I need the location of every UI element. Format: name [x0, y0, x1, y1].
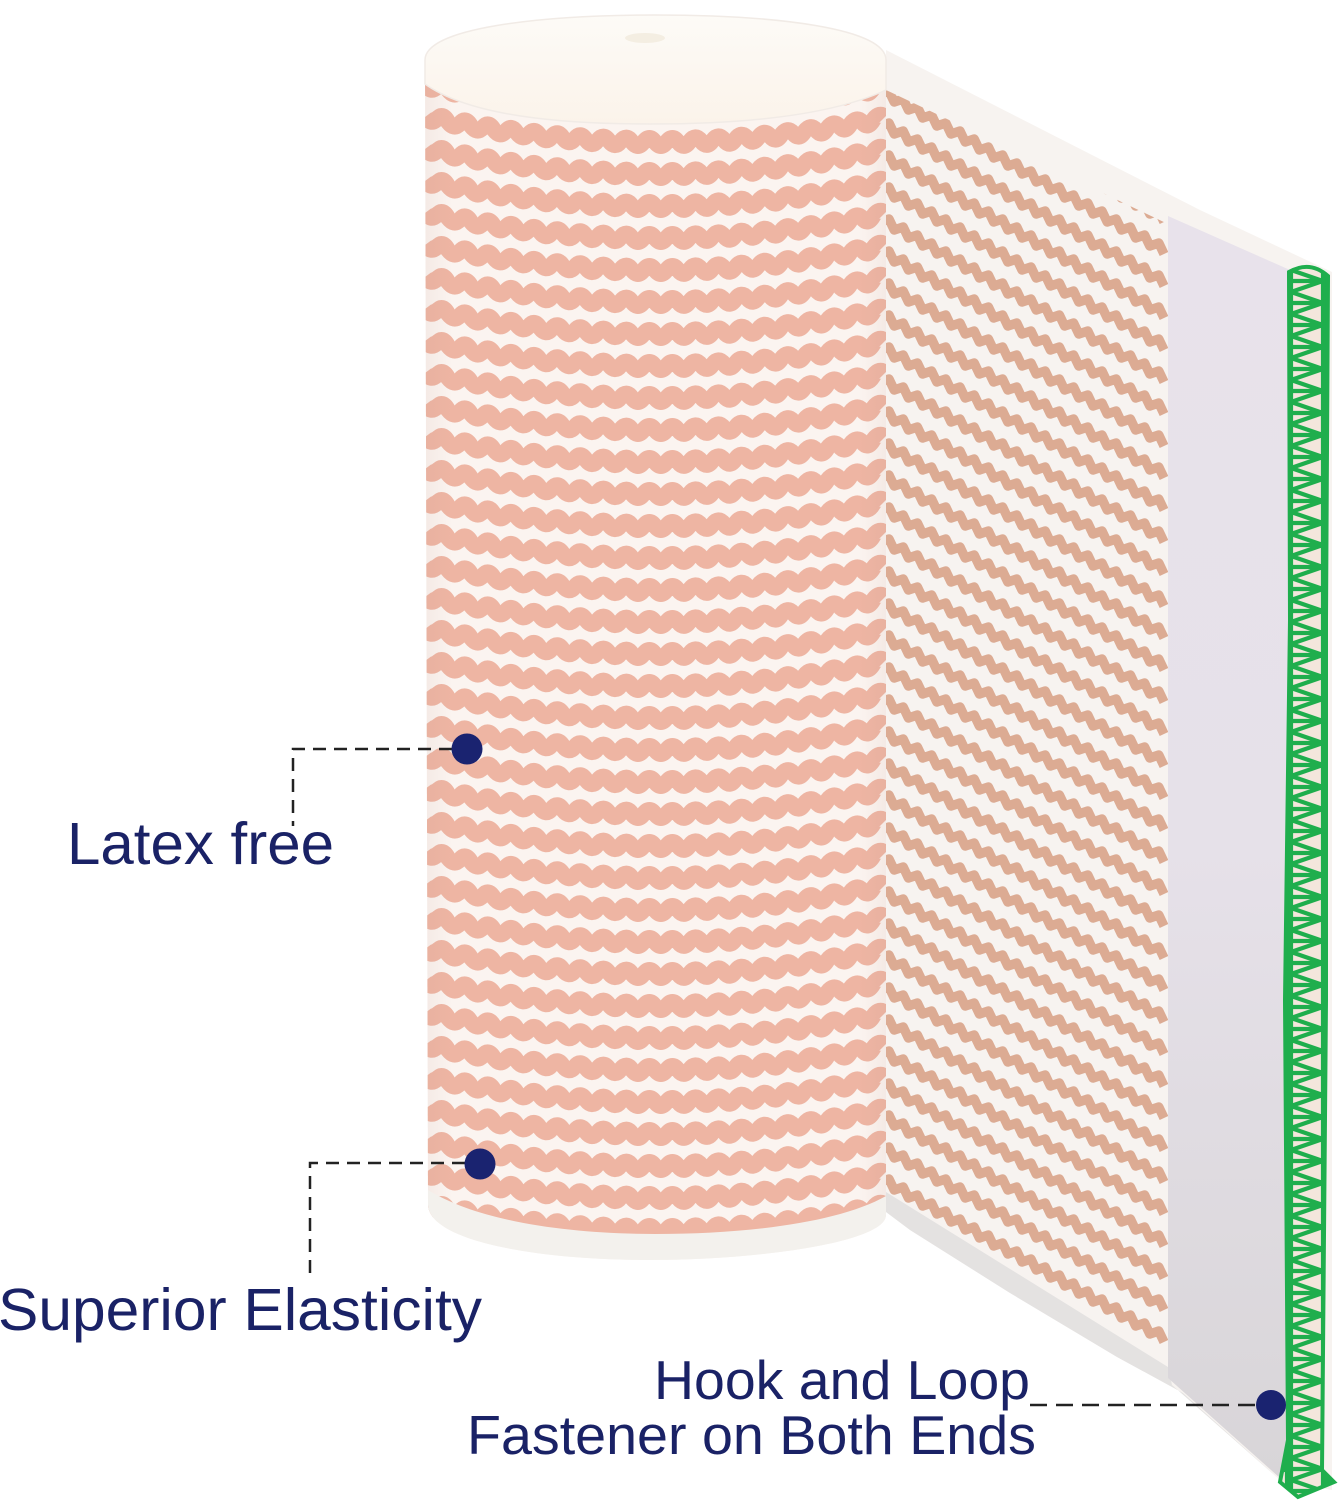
strip backing: [886, 50, 1332, 1490]
callout: superior elasticity: [0, 1148, 496, 1343]
leader line: [310, 1163, 465, 1280]
marker dot: [1256, 1390, 1286, 1420]
hook fastener patch: [1168, 216, 1290, 1482]
rolled bandage body: [425, 15, 886, 1260]
strip lower edge band: [886, 1192, 1280, 1480]
leader line: [293, 749, 452, 826]
label: Superior Elasticity: [0, 1277, 482, 1343]
marker dot: [464, 1148, 496, 1180]
leader line: [1030, 1404, 1258, 1406]
label: Latex free: [67, 811, 334, 877]
roll bottom edge: [428, 1190, 886, 1260]
label line 2: Fastener on Both Ends: [467, 1404, 1036, 1466]
unrolled bandage strip: [880, 50, 1334, 1497]
roll top cap: [425, 15, 886, 124]
roll pink wave rows: [425, 83, 885, 1234]
roll base: [425, 15, 886, 1260]
bandage illustration: [425, 15, 1334, 1497]
roll edge shading: [425, 15, 886, 1260]
green stitched edge: [1280, 267, 1334, 1497]
callout: hook and loop fastener: [467, 1349, 1286, 1466]
callout: latex free: [67, 734, 482, 877]
label line 1: Hook and Loop: [654, 1349, 1030, 1411]
zigzag woven pattern: [880, 59, 1164, 1342]
roll core mark: [625, 33, 665, 43]
marker dot: [452, 734, 482, 764]
